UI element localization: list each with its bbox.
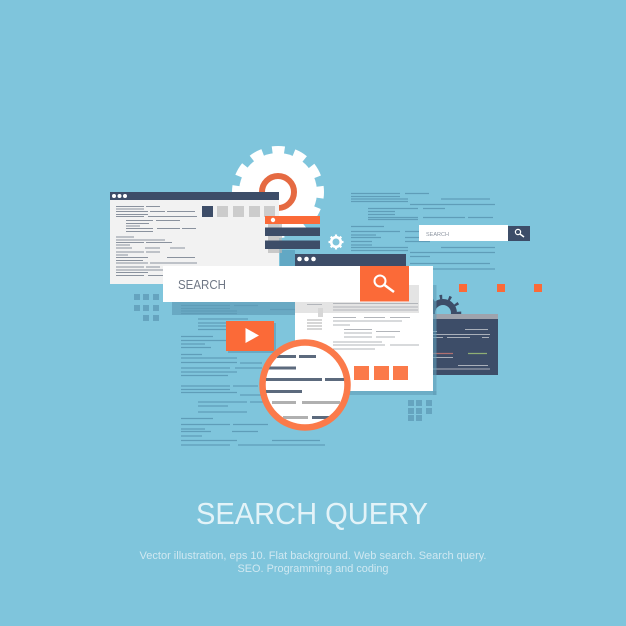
- small search bar: [419, 225, 530, 241]
- panel: left browser window: [110, 192, 279, 284]
- text lines in page: [307, 304, 419, 349]
- panel: code window: [433, 314, 498, 375]
- text lines in window: [116, 206, 197, 276]
- icon: small white gear: [328, 234, 344, 250]
- small search bar: SEARCH: [426, 232, 449, 238]
- menu stack: [265, 216, 320, 253]
- decorative pixel cluster left: [134, 294, 159, 321]
- icon: small magnifier: [515, 229, 524, 237]
- panel: rear browser header: [295, 254, 433, 285]
- icon: magnifier: [374, 276, 394, 292]
- orange dots row: [459, 284, 542, 292]
- video play button: [226, 321, 276, 353]
- search bar backing shadow: [280, 250, 295, 266]
- icon: orange gear ring: [262, 176, 294, 208]
- main search bar: [163, 266, 409, 302]
- infographic canvas: [110, 146, 542, 574]
- subtitle: [140, 550, 487, 575]
- subtitle: Vector illustration, eps 10. Flat background. Web search. Search query.: [140, 550, 487, 562]
- icon: large white gear: [237, 151, 319, 233]
- lens text lines: [266, 356, 344, 418]
- panel: main result page shadow: [172, 302, 295, 315]
- subtitle: SEO. Programming and coding: [238, 563, 388, 575]
- panel: white page: [295, 266, 436, 395]
- title: SEARCH QUERY: [196, 496, 428, 531]
- icon: small squares row: [202, 206, 213, 217]
- text lines: upper right block: [351, 194, 495, 269]
- icon: magnifying lens: [262, 342, 348, 428]
- search button: [360, 266, 409, 302]
- orange squares row: [354, 366, 408, 380]
- decorative pixel cluster right: [408, 400, 432, 421]
- main search bar: SEARCH: [178, 277, 226, 292]
- icon: dark gear behind code window: [427, 297, 459, 329]
- text lines: lower left block: [181, 306, 325, 445]
